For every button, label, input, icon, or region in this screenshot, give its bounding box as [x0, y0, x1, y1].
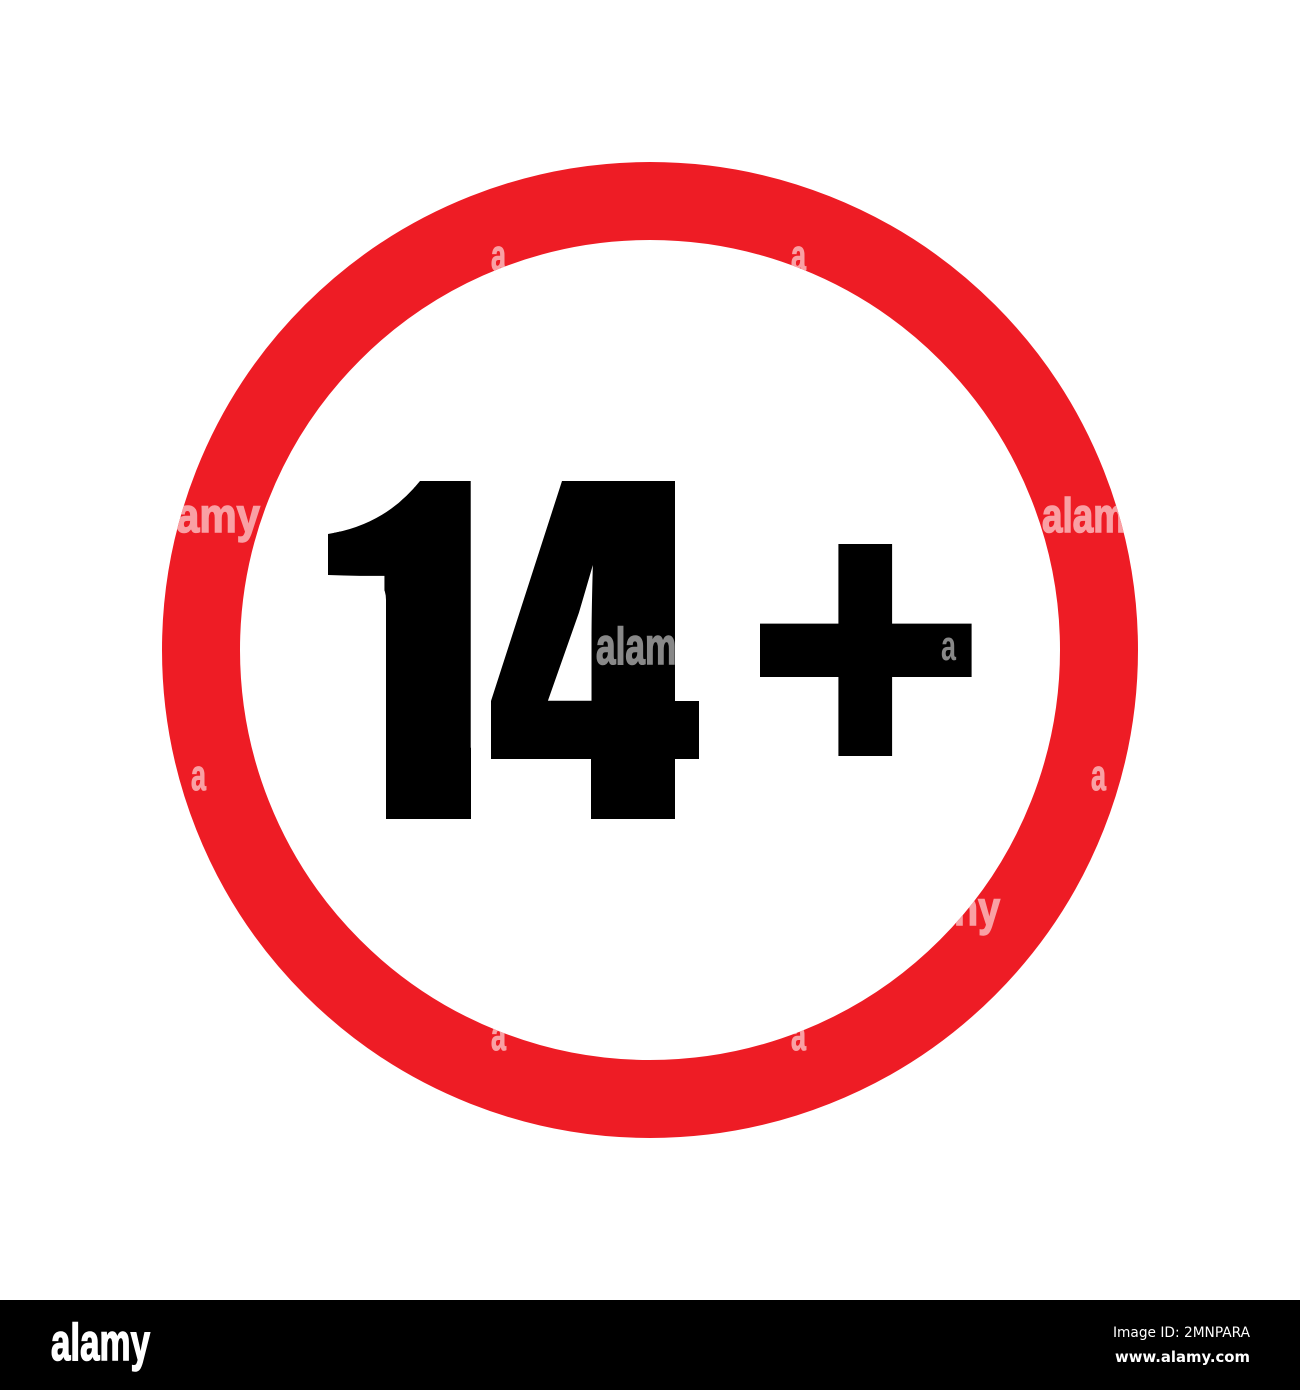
small watermark marks: a	[491, 231, 506, 280]
plus sign: +	[747, 418, 984, 871]
small watermark marks: a	[1091, 751, 1106, 800]
small watermark marks	[191, 231, 1106, 1060]
watermark lower right: ny	[954, 883, 1000, 936]
small watermark marks: a	[791, 1011, 806, 1060]
footer logo: alamy	[51, 1314, 150, 1372]
small watermark marks: a	[491, 1011, 506, 1060]
digit 1: 1	[293, 288, 545, 954]
website: www.alamy.com	[1115, 1348, 1250, 1366]
small watermark marks: a	[791, 231, 806, 280]
small watermark on plus: a	[941, 622, 956, 669]
footer bar	[0, 1300, 1300, 1390]
image id: Image ID: 2MNPARA	[1113, 1325, 1250, 1341]
digit 4: 4	[454, 102, 716, 1135]
watermark left: amy	[176, 490, 260, 543]
watermark on digit 4: alamy	[596, 618, 696, 676]
age label: 14+	[181, 481, 1120, 819]
watermarks on red ring	[176, 231, 1126, 1060]
small watermark marks: a	[191, 751, 206, 800]
red circular ring	[201, 201, 1099, 1099]
watermark right: alam	[1042, 490, 1126, 543]
